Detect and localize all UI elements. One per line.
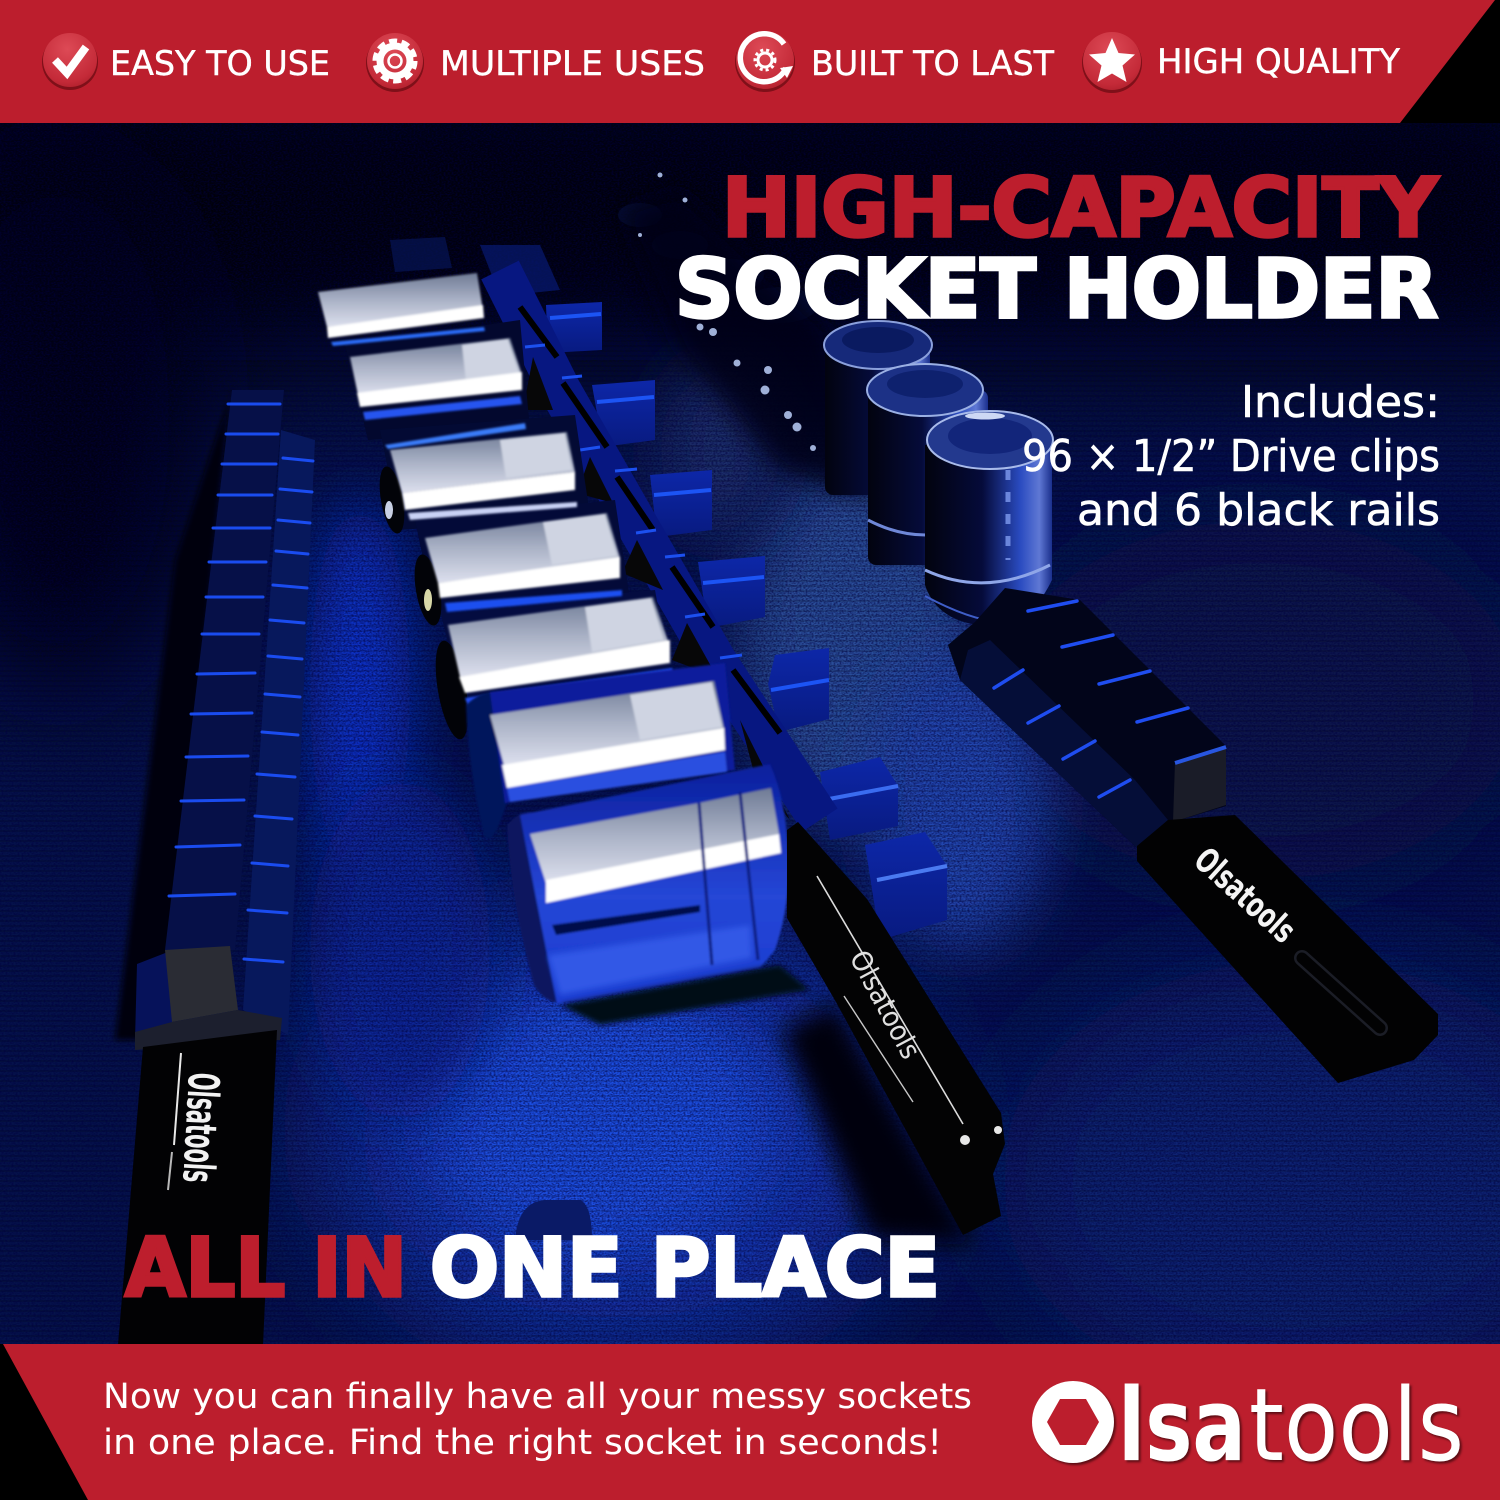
right rail sockets [618,172,1053,626]
rail logo: middle: Olsatools [843,945,927,1064]
heading: high-capacity socket holder: SOCKET HOLDER [675,243,1438,337]
left rail with clips [115,390,315,1345]
icon: gear [366,33,424,92]
text block: includes: and 6 black rails [1077,485,1440,536]
icon: check [42,33,98,90]
heading: all in one place: ONE PLACE [430,1222,940,1316]
icon: star [1082,32,1142,93]
label: built to last: BUILT TO LAST [811,44,1054,84]
socket 7 [507,764,789,1004]
text block: includes: Includes: [1241,377,1440,428]
panel: bottom banner [0,1344,1500,1500]
heading: high-capacity socket holder [675,162,1439,337]
label: multiple uses: MULTIPLE USES [440,44,705,84]
text block: includes: 96 × 1/2” Drive clips [1022,431,1440,482]
text block: tagline: in one place. Find the right socket in seconds! [103,1423,942,1463]
dark blue cap on fabric [515,1200,592,1240]
text block: includes [1022,377,1440,536]
socket 1 [318,273,485,346]
heading: high-capacity socket holder: HIGH-CAPACITY [722,162,1439,256]
sockets: middle rail row [318,273,810,1025]
middle rail end plate [780,822,1005,1245]
socket 5 [448,597,674,706]
middle rail: blue cubes and clips [390,237,947,940]
heading: all in one place [125,1222,940,1316]
logo: Olsatools: lsa [1118,1366,1246,1484]
socket 4 [425,513,622,612]
socket front [925,411,1053,626]
socket 3 [390,432,577,520]
logo: Olsatools [1032,1366,1464,1484]
heading: all in one place: ALL IN [125,1222,407,1316]
socket 2 [350,338,526,449]
right rail with clips [948,588,1438,1083]
left rail with clips: Olsatools [172,1071,228,1184]
panel: top banner [0,0,1500,123]
label: high quality: HIGH QUALITY [1157,42,1400,82]
text block: tagline [103,1377,972,1463]
text block: tagline: Now you can finally have all your messy sockets [103,1377,972,1417]
socket middle [867,364,988,565]
icon: circular arrow with gear [735,31,795,92]
socket 6 [466,663,735,839]
socket far [824,321,932,495]
label: easy to use: EASY TO USE [110,44,330,84]
logo: Olsatools: tools [1249,1366,1464,1484]
rail logo: right: Olsatools [1186,840,1303,951]
